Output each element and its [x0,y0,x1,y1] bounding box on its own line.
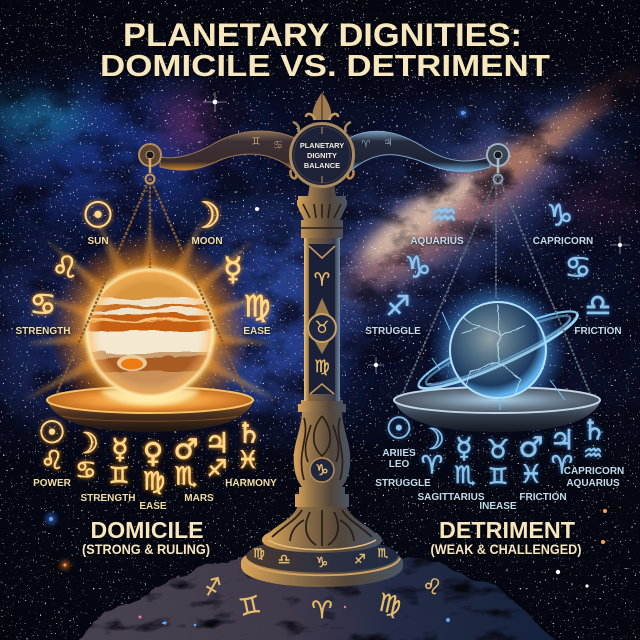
icon: capricorn lower: ♑︎ [405,250,431,286]
icon: venus: ♀︎ [143,436,163,470]
rock pedestal: ♈︎ [311,596,333,624]
icon: mercury: ☿︎ [223,250,243,288]
icon: sagittarius: ♐︎ [385,290,411,322]
heading: domicile: DOMICILE [90,517,204,543]
column glyph: aries: ♈︎ [314,270,330,290]
icon: scorpio: ♏︎ [175,462,197,490]
detriment row labels: STRUGGLE [375,478,431,489]
left pivot ring [139,144,161,184]
rock pedestal [60,554,570,640]
right arm [349,131,490,172]
icon: moon: ☽︎ [189,196,221,236]
labels around jupiter [16,236,271,337]
detriment row labels [375,448,624,512]
icon: cancer: ♋︎ [30,288,56,322]
title [100,17,550,83]
column medallion: taurus [308,298,336,354]
medallion: planetary dignity balance: BALANCE [304,161,340,170]
column medallion: taurus: ♉︎ [314,318,330,338]
heading: domicile [82,517,210,557]
icon: cancer: ♋︎ [565,250,591,286]
planet glow [50,233,250,433]
domicile row labels: HARMONY [225,478,277,489]
icon: aries: ♈︎ [421,450,443,480]
labels around ringed planet: FRICTION [574,326,622,337]
icon: mars: ♂︎ [518,430,544,464]
heading: detriment: DETRIMENT [439,517,575,543]
labels around jupiter: MOON [191,236,223,247]
rock pedestal: ♊︎ [237,590,263,622]
capital with leaf ornament [297,200,347,238]
vase with scroll ornament [294,412,350,487]
base disk: ♐︎ [354,552,366,568]
rock pedestal: ♍︎ [376,587,404,621]
jupiter planet [82,265,218,398]
icon: sun: ☉︎ [386,412,412,446]
labels around ringed planet: STRUGGLE [365,326,421,337]
detriment row labels: ARIIES [382,448,416,459]
icon: leo: ♌︎ [52,250,78,286]
detriment row labels: FRICTION [519,492,567,503]
icon: jupiter: ♃︎ [204,426,230,460]
icon: capricorn: ♑︎ [547,198,573,234]
heading: domicile: (STRONG & RULING) [82,541,210,557]
icon: aquarius: ♒︎ [583,442,603,466]
beam glyphs [252,136,392,152]
panel: detriment glyph rows [375,412,624,512]
right chains [403,175,590,393]
icon: moon: ☽︎ [73,426,99,460]
icon: jupiter: ♃︎ [549,424,575,456]
icon: sun: ☉︎ [82,196,114,236]
icon: aquarius: ♒︎ [431,198,457,234]
symbols around ringed planet [365,198,622,337]
beam glyphs: ♃︎ [384,138,392,148]
icon: pisces: ♓︎ [237,446,259,474]
base disk: ♑︎ [316,555,328,571]
title: DOMICILE VS. DETRIMENT [100,48,550,83]
column glyph: virgo: ♍︎ [314,357,330,377]
sun rays [19,214,281,406]
column shaft [304,238,340,401]
left arm [160,131,295,172]
icon: gemini: ♊︎ [488,464,508,490]
left pan assembly: domicile [19,178,281,433]
heading: detriment: (WEAK & CHALLENGED) [430,541,582,557]
icon: saturn: ♄︎ [236,416,262,450]
capricorn medallion [310,458,334,482]
bright stars [45,92,630,588]
base disk: ♎︎ [278,552,290,568]
neck rings [295,487,349,507]
icon: saturn: ♄︎ [581,414,607,446]
beam glyphs: ♊︎ [252,136,261,148]
icon: virgo: ♍︎ [244,290,270,324]
domicile row labels: STRENGTH [80,493,136,504]
icon: virgo: ♍︎ [143,466,165,496]
medallion: planetary dignity balance: PLANETARY [300,141,344,150]
right pivot ring [487,144,509,184]
symbols around jupiter [16,196,271,337]
beam glyphs: ♋︎ [273,138,283,152]
icon: scorpio: ♏︎ [454,461,476,489]
balance beam [139,92,509,186]
icon: moon: ☽︎ [419,422,445,456]
labels around jupiter: STRENGTH [16,326,70,337]
icon: pisces: ♓︎ [520,460,542,488]
labels around ringed planet: AQUARIUS [410,236,464,247]
icon: leo: ♌︎ [40,446,64,476]
labels around jupiter: SUN [87,236,109,247]
icon: mercury: ☿︎ [111,432,129,466]
labels around ringed planet: CAPRICORN [533,236,593,247]
detriment row labels: LEO [389,459,409,470]
labels around ringed planet [365,236,622,337]
icon: sun: ☉︎ [38,415,66,451]
flared foot with leaf ornament [266,505,378,550]
detriment row labels: SAGITTARIUS [417,492,485,503]
icon: aries second: ♈︎ [551,450,573,480]
rock pedestal: ♐︎ [201,573,225,601]
icon: mars: ♂︎ [173,432,199,466]
left chains [57,178,245,393]
medallion: planetary dignity balance [290,124,354,186]
labels around jupiter: EASE [243,326,271,337]
rock pedestal: ♌︎ [419,572,445,600]
domicile row labels: MARS [184,493,214,504]
icon: sagittarius: ♐︎ [207,456,227,482]
base disk: ♍︎ [253,546,265,562]
scale stand [241,183,403,587]
collar [298,400,346,412]
icon: cancer: ♋︎ [75,456,97,484]
right pan assembly: detriment [394,175,601,432]
finial [290,92,354,178]
title: PLANETARY DIGNITIES: [123,17,522,53]
detriment row labels: CAPRICORN [564,466,624,477]
foot step [262,525,382,553]
detriment row labels: AQUARIUS [566,478,620,489]
left pan [47,387,254,432]
heading: detriment [430,517,582,557]
cracked planet with ring [413,300,583,410]
domicile row labels [33,478,277,512]
domicile row labels: POWER [33,478,72,489]
icon: gemini: ♊︎ [109,463,129,489]
capricorn medallion: ♑︎ [315,461,329,479]
icon: taurus: ♉︎ [486,435,510,465]
detriment row labels: INEASE [479,501,517,512]
planet glow [428,280,568,420]
pedestal under hub [298,183,346,201]
base disk [241,538,403,587]
domicile row labels: EASE [139,501,167,512]
icon: libra: ♎︎ [585,288,611,324]
panel: domicile glyph rows [33,415,277,512]
right pan [394,387,601,432]
beam glyphs: ♈︎ [362,140,371,150]
icon: mercury: ☿︎ [455,432,473,464]
base disk: ♏︎ [378,546,388,560]
medallion: planetary dignity balance: DIGNITY [307,151,337,160]
